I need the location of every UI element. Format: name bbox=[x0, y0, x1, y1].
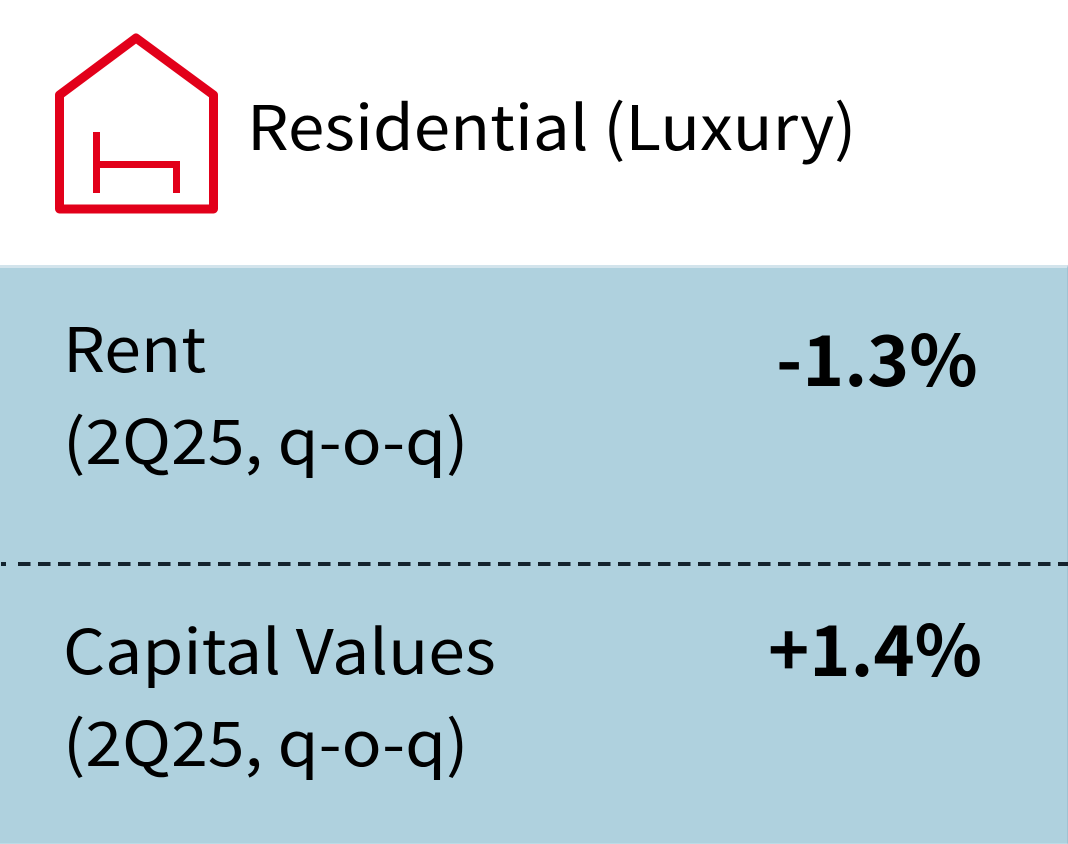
rent label: (2Q25, q-o-q) bbox=[63, 392, 468, 482]
capital values label: (2Q25, q-o-q) bbox=[63, 694, 468, 784]
panel: metrics bbox=[0, 265, 1068, 844]
capital values value: +1.4% bbox=[768, 596, 982, 697]
panel: header bbox=[0, 0, 1068, 265]
rent label bbox=[63, 300, 468, 482]
capital values label: Capital Values bbox=[63, 602, 496, 692]
capital values label bbox=[63, 602, 496, 784]
icon: house with bed bbox=[55, 33, 218, 214]
heading: Residential (Luxury) bbox=[246, 79, 856, 168]
rent value: -1.3% bbox=[776, 306, 978, 407]
rent label: Rent bbox=[63, 300, 206, 390]
